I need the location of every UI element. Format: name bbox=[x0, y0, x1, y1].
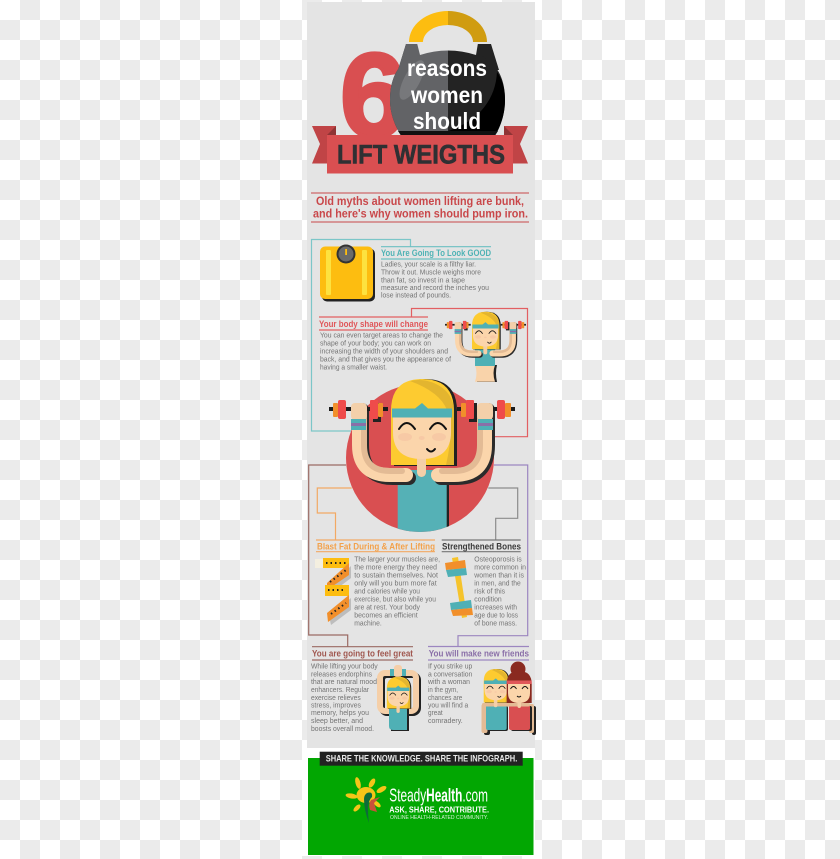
kettlebell words: should bbox=[413, 108, 481, 134]
section: blast fat: the more energy they need bbox=[354, 564, 437, 572]
icon: tape measure bbox=[315, 558, 351, 625]
section: strengthened bones: Strengthened Bones bbox=[442, 541, 521, 551]
section: new friends: You will make new friends bbox=[429, 649, 529, 659]
subtitle bbox=[311, 193, 529, 222]
section: feel great: stress, improves bbox=[311, 702, 361, 710]
icon: woman with arms overhead bbox=[380, 665, 418, 731]
kettlebell words: reasons bbox=[407, 55, 487, 81]
section: new friends: great bbox=[428, 710, 443, 717]
section: strengthened bones: in men, and the bbox=[474, 580, 521, 588]
title graphic: kettlebell with big six bbox=[312, 11, 528, 174]
kettlebell handle bbox=[409, 11, 487, 42]
section connector frames bbox=[309, 240, 528, 646]
section: body shape: having a smaller waist. bbox=[320, 364, 387, 371]
section: new friends: you will find a bbox=[428, 702, 468, 710]
section: strengthened bones: age due to loss bbox=[474, 612, 518, 620]
section: feel great: that are natural mood bbox=[311, 679, 377, 686]
section: blast fat: Blast Fat During & After Lifting bbox=[317, 541, 435, 551]
section: strengthened bones: risk of this bbox=[474, 588, 505, 596]
section: blast fat: machine. bbox=[354, 620, 382, 628]
sub tagline: ONLINE HEALTH-RELATED COMMUNITY. bbox=[390, 815, 488, 821]
section: blast fat: exercise, but also while you bbox=[354, 596, 436, 604]
icon: two women friends bbox=[482, 662, 536, 735]
section: body shape: back, and that gives you the appearance of bbox=[320, 357, 451, 364]
kettlebell words bbox=[407, 55, 487, 134]
section: feel great: While lifting your body bbox=[311, 664, 378, 670]
section: strengthened bones bbox=[442, 540, 526, 628]
section: new friends bbox=[427, 646, 529, 725]
section: strengthened bones: Osteoporosis is bbox=[474, 556, 522, 564]
main illustration: woman lifting dumbbells on red circle bbox=[329, 379, 515, 540]
section: feel great: releases endorphins bbox=[311, 672, 372, 678]
section: strengthened bones: increases with bbox=[474, 604, 517, 612]
section: look good bbox=[381, 247, 491, 300]
ribbon banner bbox=[312, 126, 528, 174]
banner title: LIFT WEIGTHS bbox=[337, 140, 505, 170]
section: blast fat: and calories while you bbox=[354, 588, 420, 596]
section: feel great: You are going to feel great bbox=[312, 649, 413, 659]
section: look good: measure and record the inches you bbox=[381, 285, 489, 292]
share bar: SHARE THE KNOWLEDGE. SHARE THE INFOGRAPH. bbox=[326, 754, 517, 764]
section: feel great: boosts overall mood. bbox=[311, 726, 374, 733]
friend with red hair bbox=[507, 662, 532, 708]
section: body shape: You can even target areas to change the bbox=[320, 333, 443, 340]
kettlebell words: women bbox=[410, 82, 483, 108]
icon: sun logo bbox=[345, 777, 388, 823]
section: blast fat: The larger your muscles are, bbox=[354, 556, 440, 564]
icon: bathroom scale bbox=[320, 244, 375, 302]
section: new friends: with a woman bbox=[427, 679, 470, 686]
section: blast fat: to sustain themselves. Not bbox=[354, 572, 438, 580]
section: feel great: exercise relieves bbox=[311, 695, 361, 702]
section: look good: You Are Going To Look GOOD bbox=[381, 248, 491, 258]
section: blast fat: becomes an efficient bbox=[354, 612, 418, 620]
section: new friends: chances are bbox=[428, 695, 462, 702]
kettlebell body bbox=[390, 40, 505, 137]
tagline: ASK, SHARE, CONTRIBUTE. bbox=[389, 805, 489, 814]
section: body shape: Your body shape will change bbox=[319, 319, 428, 329]
section: strengthened bones: women than it is bbox=[473, 572, 524, 580]
section: blast fat: only will you burn more fat bbox=[354, 580, 437, 588]
section: look good: lose instead of pounds. bbox=[381, 293, 451, 300]
section: look good: Ladies, your scale is a filthy liar. bbox=[381, 262, 476, 269]
subtitle: and here's why women should pump iron. bbox=[313, 209, 528, 221]
icon: small woman lifting dumbbells bbox=[445, 312, 526, 382]
section: look good: Throw it out. Muscle weighs more bbox=[381, 270, 481, 276]
footer: green logo panel bbox=[308, 752, 534, 855]
section: feel great: sleep better, and bbox=[311, 718, 363, 725]
section: feel great: enhancers. Regular bbox=[311, 687, 370, 694]
background panel bbox=[307, 2, 535, 748]
section: new friends: a conversation bbox=[428, 672, 472, 678]
section: blast fat bbox=[316, 540, 440, 628]
section: body shape: shape of your body; you can work on bbox=[320, 341, 431, 348]
section: blast fat: are at rest. Your body bbox=[354, 604, 420, 612]
section: feel great: memory, helps you bbox=[311, 710, 369, 717]
share bar bbox=[320, 752, 523, 766]
section: strengthened bones: condition bbox=[474, 596, 502, 604]
section: new friends: in the gym, bbox=[428, 687, 458, 694]
section: body shape bbox=[319, 317, 451, 371]
footer white band bbox=[302, 748, 535, 856]
section: new friends: comradery. bbox=[428, 718, 463, 725]
section: strengthened bones: more common in bbox=[474, 564, 526, 572]
icon: yellow dumbbell bbox=[445, 557, 473, 618]
subtitle: Old myths about women lifting are bunk, bbox=[316, 196, 524, 208]
section: look good: than fat, so invest in a tape bbox=[381, 277, 465, 284]
big number six: 6 bbox=[340, 30, 406, 162]
brand name: SteadyHealth.com bbox=[389, 786, 488, 806]
section: feel great bbox=[311, 647, 413, 733]
section: new friends: If you strike up bbox=[428, 664, 472, 670]
section: strengthened bones: of bone mass. bbox=[474, 620, 517, 628]
section: body shape: increasing the width of your shoulders and bbox=[320, 349, 448, 356]
